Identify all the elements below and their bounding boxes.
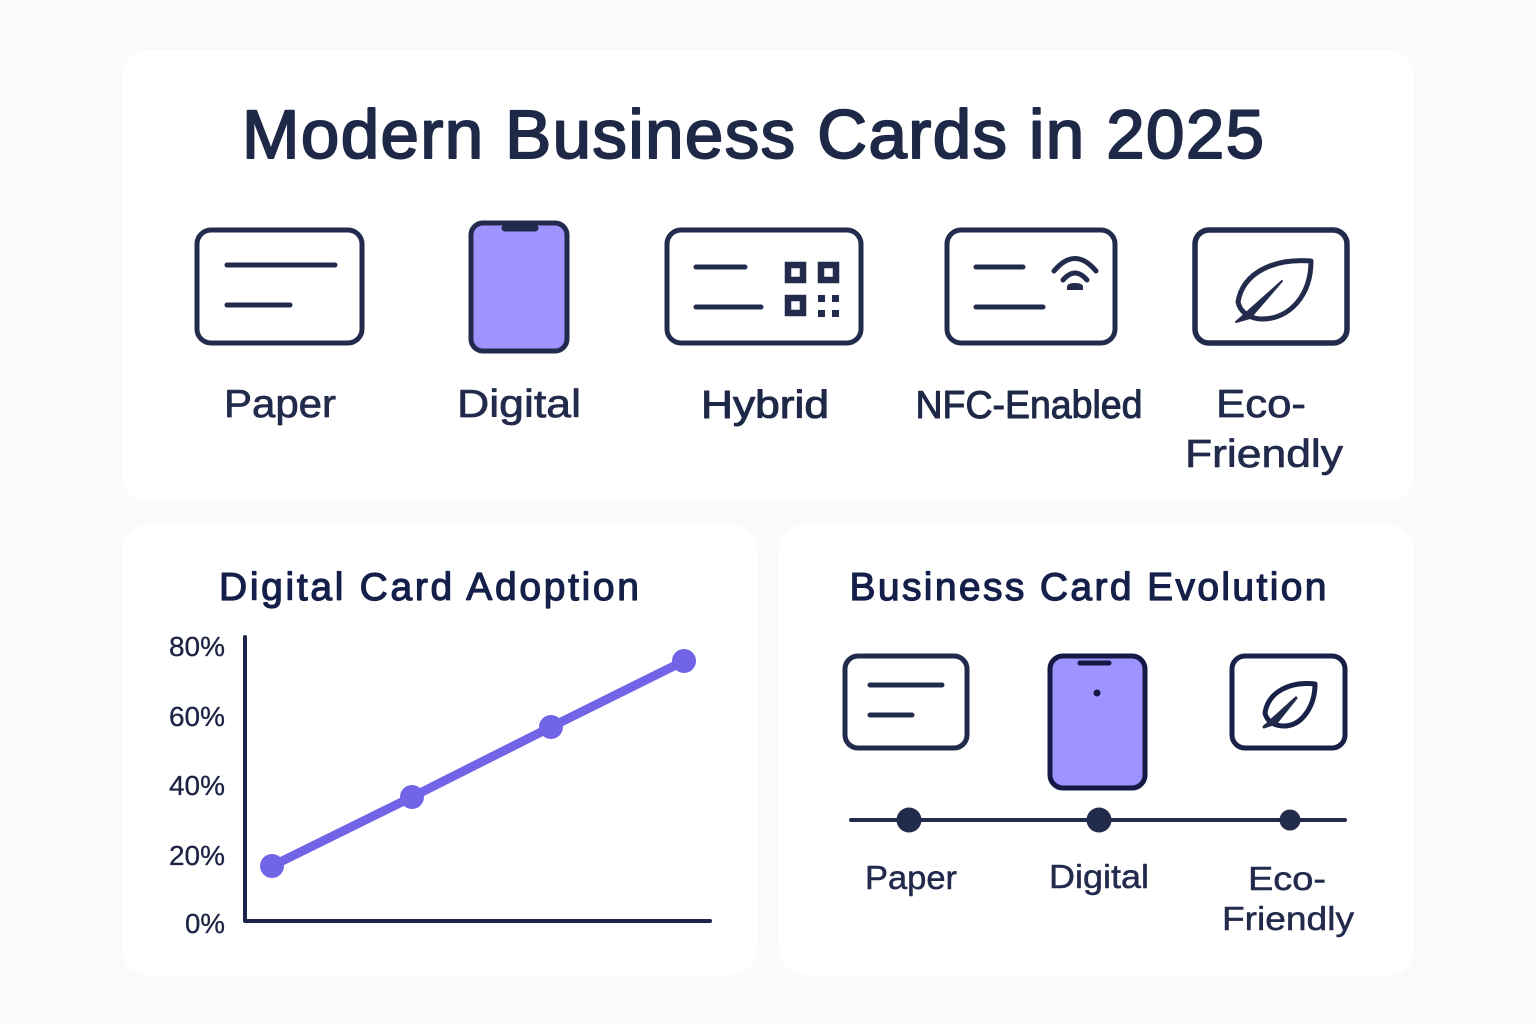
label: Eco-Friendly: Eco- <box>1216 383 1306 426</box>
y axis labels: 20% <box>169 840 225 871</box>
y axis labels <box>169 631 225 939</box>
icon: digital phone <box>471 223 567 351</box>
icon: paper card <box>197 230 362 343</box>
title: Modern Business Cards in 2025 <box>242 96 1264 173</box>
data points <box>260 649 696 878</box>
timeline label: Paper: Paper <box>865 859 957 896</box>
label: Hybrid: Hybrid <box>701 384 829 427</box>
icon: eco card <box>1195 230 1347 343</box>
axes <box>245 637 710 921</box>
label: Digital: Digital <box>457 383 581 426</box>
icon: hybrid card with QR code <box>667 230 861 343</box>
y axis labels: 60% <box>169 701 225 732</box>
icon: evolution phone <box>1050 656 1145 788</box>
timeline label: Eco-Friendly <box>1222 860 1355 937</box>
line chart <box>169 631 710 939</box>
icon: evolution paper <box>845 656 967 748</box>
label: Eco-Friendly <box>1185 383 1344 476</box>
label: NFC-Enabled: NFC-Enabled <box>916 384 1142 427</box>
heading: Business Card Evolution: Business Card Evolution <box>850 566 1326 609</box>
y axis labels: 0% <box>185 908 225 939</box>
y axis labels: 40% <box>169 770 225 801</box>
heading: Digital Card Adoption: Digital Card Adoption <box>219 566 639 609</box>
label: Eco-Friendly: Friendly <box>1185 433 1344 476</box>
timeline label: Eco-Friendly: Friendly <box>1222 900 1355 937</box>
icon: NFC card <box>947 230 1115 343</box>
y axis labels: 80% <box>169 631 225 662</box>
label: Paper: Paper <box>224 383 336 426</box>
data line <box>272 661 684 866</box>
panel: card types <box>122 50 1414 501</box>
timeline <box>851 808 1345 832</box>
panel: evolution <box>779 524 1414 975</box>
panel: adoption chart <box>122 524 757 975</box>
timeline label: Eco-Friendly: Eco- <box>1248 860 1326 897</box>
timeline label: Digital: Digital <box>1049 858 1149 895</box>
icon: evolution eco <box>1232 656 1345 748</box>
